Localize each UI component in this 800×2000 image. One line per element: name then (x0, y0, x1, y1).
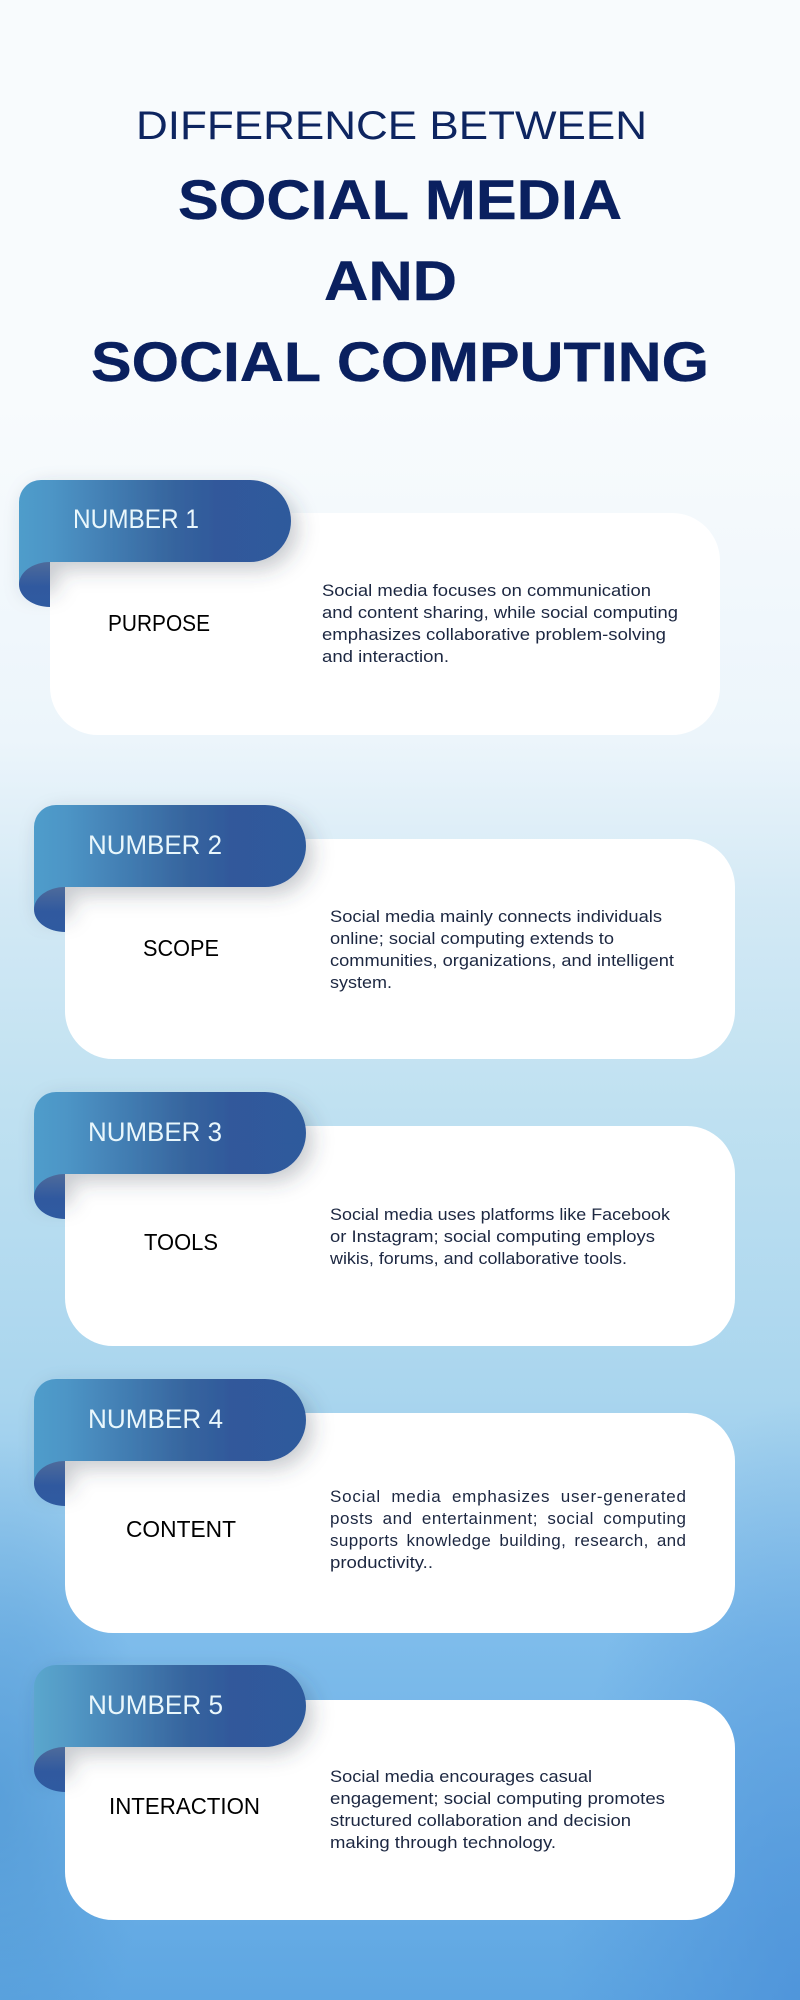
card background 1 (50, 513, 720, 735)
banner ribbon 1 (19, 480, 291, 607)
banner ribbon 2 (34, 805, 306, 932)
body text 2: online; social computing extends to (330, 929, 614, 948)
panel: content (34, 1379, 735, 1633)
panel: purpose (19, 480, 720, 735)
label: interaction: INTERACTION (109, 1793, 260, 1819)
body text 2: system. (330, 973, 392, 992)
body text 3: or Instagram; social computing employs (330, 1227, 655, 1246)
title line: social computing: SOCIAL COMPUTING (91, 330, 709, 393)
body text 5: structured collaboration and decision (330, 1811, 631, 1830)
body text 1: and content sharing, while social computing (322, 603, 678, 622)
label: scope: SCOPE (143, 935, 219, 961)
body text 2: Social media mainly connects individuals (330, 907, 662, 926)
panel: tools (34, 1092, 735, 1346)
body text 3: wikis, forums, and collaborative tools. (329, 1249, 627, 1268)
body text 2 (330, 907, 674, 992)
title line: social media: SOCIAL MEDIA (178, 168, 622, 231)
title line: and: AND (324, 249, 457, 312)
card background 3 (65, 1126, 735, 1346)
body text 1 (322, 581, 678, 666)
label: tools: TOOLS (144, 1229, 218, 1255)
body text 1: and interaction. (322, 647, 449, 666)
card background 4 (65, 1413, 735, 1633)
banner ribbon 3 (34, 1092, 306, 1219)
body text 1: emphasizes collaborative problem-solving (322, 625, 666, 644)
banner text: number 3: NUMBER 3 (88, 1117, 222, 1147)
body text 5 (330, 1767, 665, 1852)
body text 4: Social media emphasizes user-generated (330, 1487, 686, 1506)
label: content: CONTENT (126, 1516, 236, 1542)
banner ribbon 5 (34, 1665, 306, 1792)
title line: difference between: DIFFERENCE BETWEEN (136, 104, 647, 148)
banner text: number 5: NUMBER 5 (88, 1690, 223, 1720)
panel: scope (34, 805, 735, 1059)
banner ribbon 4 (34, 1379, 306, 1506)
body text 4 (330, 1487, 686, 1572)
card background 5 (65, 1700, 735, 1920)
banner text: number 2: NUMBER 2 (88, 830, 222, 860)
banner text: number 1: NUMBER 1 (73, 504, 199, 534)
body text 3: Social media uses platforms like Facebook (330, 1205, 671, 1224)
title (91, 104, 709, 393)
body text 4: posts and entertainment; social computing (330, 1509, 686, 1528)
banner text: number 4: NUMBER 4 (88, 1404, 223, 1434)
body text 5: Social media encourages casual (330, 1767, 592, 1786)
body text 1: Social media focuses on communication (322, 581, 651, 600)
panel: interaction (34, 1665, 735, 1920)
body text 3 (329, 1205, 671, 1268)
body text 5: engagement; social computing promotes (330, 1789, 665, 1808)
body text 4: productivity.. (330, 1553, 433, 1572)
card background 2 (65, 839, 735, 1059)
body text 5: making through technology. (330, 1833, 556, 1852)
label: purpose: PURPOSE (108, 610, 210, 636)
body text 4: supports knowledge building, research, and (330, 1531, 686, 1550)
body text 2: communities, organizations, and intelligent (330, 951, 674, 970)
